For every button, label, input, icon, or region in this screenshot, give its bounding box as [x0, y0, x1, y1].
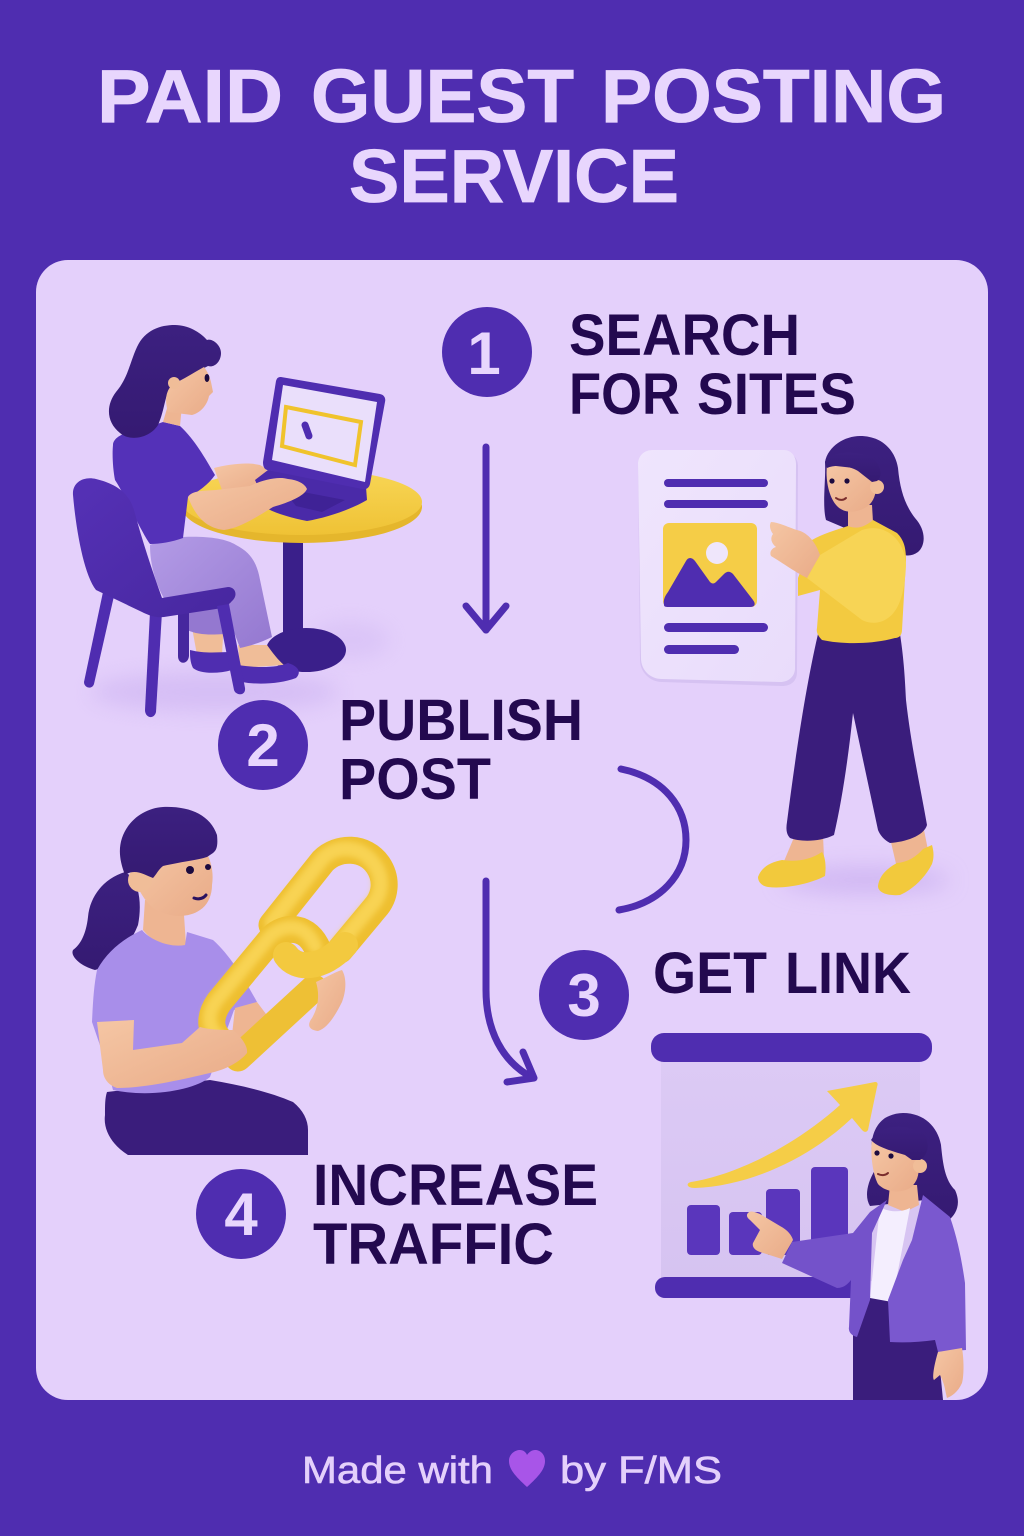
step 2 label: POST [339, 747, 491, 812]
ponytail [72, 872, 140, 970]
step 1 number [442, 307, 532, 397]
near arm and hand [97, 1020, 247, 1088]
step 3 number: 3 [567, 962, 601, 1029]
step 2 label: PUBLISH [339, 688, 583, 753]
title: POSTING [601, 54, 946, 138]
trousers [853, 1296, 943, 1400]
face [827, 465, 876, 512]
trousers [105, 1080, 308, 1155]
chain: front link [210, 927, 318, 1042]
step 2 number: 2 [246, 712, 280, 779]
neck [163, 405, 182, 426]
shirt [92, 930, 257, 1093]
sweater [798, 520, 906, 643]
shoes [758, 852, 826, 887]
far leg [187, 600, 225, 655]
chain: upper link [272, 849, 384, 950]
hand [770, 522, 820, 578]
icon: woman holding chain link [72, 807, 384, 1155]
board [661, 1055, 920, 1281]
chain: lower strand [238, 988, 314, 1058]
step 4 label: INCREASE [313, 1153, 598, 1218]
icon: woman working at laptop [73, 325, 422, 717]
step 4 number [196, 1169, 286, 1259]
step 3 label: GET [653, 941, 767, 1006]
hair back [824, 436, 924, 555]
footer credit [302, 1450, 722, 1492]
hair back [109, 325, 221, 438]
footer credit: Made with [302, 1450, 493, 1492]
face [871, 1140, 919, 1191]
step 1 label: SEARCH [569, 303, 800, 368]
footer credit: by F/MS [560, 1450, 722, 1492]
step 1 label: FOR [569, 362, 680, 427]
far arm and hand [214, 464, 272, 492]
icon: woman with document [638, 436, 950, 895]
step 4 label [313, 1153, 598, 1277]
near shoe and ankle [238, 645, 284, 668]
step 4 number: 4 [224, 1181, 258, 1248]
right hand [933, 1348, 964, 1398]
face [166, 367, 213, 415]
step 1 number: 1 [467, 320, 501, 387]
laptop [255, 377, 385, 521]
arrow: step 1 to 2 [466, 447, 506, 630]
step 1 label: SITES [697, 362, 856, 427]
document [638, 450, 798, 686]
trousers [786, 634, 927, 843]
face [135, 845, 213, 916]
step 3 label: LINK [785, 941, 911, 1006]
torso [113, 422, 215, 544]
title [97, 54, 946, 218]
table [283, 535, 303, 635]
title: PAID [97, 54, 283, 138]
pointing hand [747, 1211, 793, 1259]
chain: upper link bottom arc [286, 945, 345, 965]
step 4 label: TRAFFIC [313, 1212, 554, 1277]
chair [73, 478, 245, 717]
panel: steps background [36, 260, 988, 1400]
step 3 number [539, 950, 629, 1040]
far hand [309, 970, 345, 1031]
arrow: curved connector [619, 769, 686, 910]
step 2 label [339, 688, 583, 812]
growth arrow [688, 1082, 878, 1188]
bar chart [687, 1167, 848, 1260]
jacket [782, 1195, 966, 1352]
neck [848, 505, 873, 529]
neck [143, 900, 186, 947]
arrow: step 3 to 4 [486, 881, 534, 1082]
step 3 label [653, 941, 911, 1006]
far arm [232, 1002, 272, 1048]
title: SERVICE [349, 134, 679, 218]
neck [888, 1185, 919, 1212]
trousers [150, 537, 272, 648]
near arm and hand [188, 478, 307, 530]
ankles [782, 835, 824, 866]
step 1 label [569, 303, 856, 427]
hair [867, 1113, 958, 1220]
hair [120, 807, 217, 878]
icon: woman presenting growth chart [651, 1033, 966, 1400]
icon: purple heart [509, 1450, 545, 1487]
title: GUEST [311, 54, 574, 138]
step 2 number [218, 700, 308, 790]
blouse [870, 1207, 910, 1302]
